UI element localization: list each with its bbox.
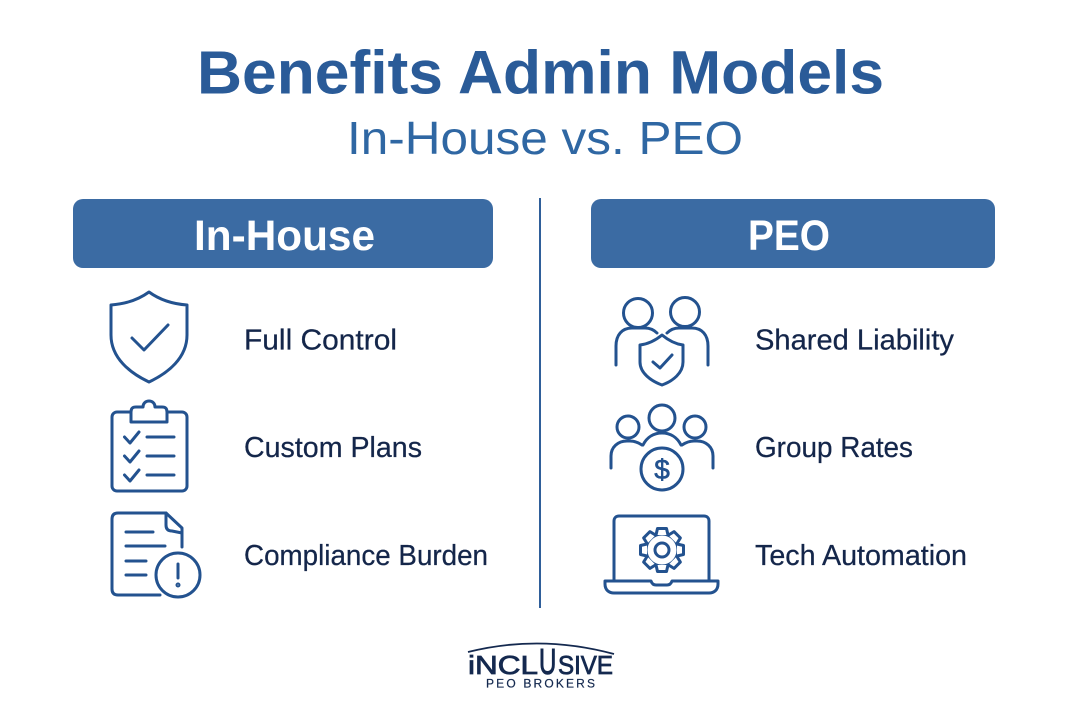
icon: group with dollar coin xyxy=(611,405,713,490)
dollar sign: $ xyxy=(654,454,670,485)
icon: people with shield xyxy=(616,298,708,385)
icon: laptop with gear xyxy=(605,516,718,593)
heading: in-house xyxy=(73,199,493,268)
label: shared liability: Shared Liability xyxy=(755,324,954,356)
logo: inclusive peo brokers xyxy=(468,642,614,690)
label: compliance burden: Compliance Burden xyxy=(244,540,488,572)
panel: in-house column xyxy=(73,199,493,597)
label: full control: Full Control xyxy=(244,324,397,356)
logo: inclusive peo brokers: SIVE xyxy=(558,650,613,680)
heading: peo xyxy=(591,199,995,268)
icon: clipboard checklist xyxy=(112,401,187,491)
icon: shield with check xyxy=(111,292,187,382)
title: Benefits Admin Models xyxy=(197,38,884,106)
icon: document with alert xyxy=(112,513,200,597)
heading: peo: PEO xyxy=(748,212,830,260)
label: group rates: Group Rates xyxy=(755,432,913,464)
heading: in-house: In-House xyxy=(194,212,375,260)
label: custom plans: Custom Plans xyxy=(244,432,422,464)
panel: peo column xyxy=(591,199,995,593)
logo: inclusive peo brokers: U xyxy=(539,642,556,682)
subtitle: In-House vs. PEO xyxy=(347,112,743,164)
center divider xyxy=(539,198,541,608)
logo: inclusive peo brokers: iNCL xyxy=(468,650,538,680)
logo: inclusive peo brokers: PEO BROKERS xyxy=(486,676,595,690)
label: tech automation: Tech Automation xyxy=(755,540,967,572)
